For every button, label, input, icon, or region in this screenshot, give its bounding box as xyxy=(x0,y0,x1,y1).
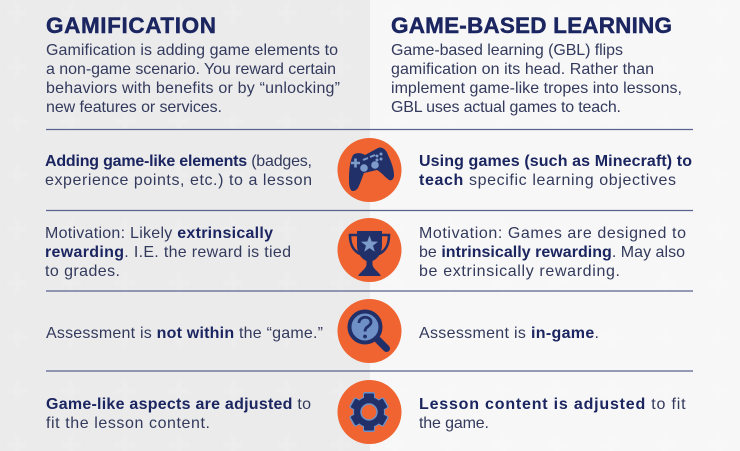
text block: game-based learning definition: GBL uses actual games to teach. xyxy=(391,99,621,116)
text block: gamification definition: a non-game scenario. You reward certain xyxy=(46,61,336,78)
text: gamification elements: experience points, etc.) to a lesson xyxy=(45,172,312,189)
row 3: assessment comparison xyxy=(46,299,599,363)
text: game-based motivation: Motivation: Games are designed to xyxy=(419,225,686,242)
text: game-based elements: Using games (such as Minecraft) to xyxy=(419,153,692,170)
text: gamification adjustment: fit the lesson content. xyxy=(46,415,210,432)
icon: trophy xyxy=(338,218,402,282)
text: game-based assessment: Assessment is in-game. xyxy=(419,325,599,342)
text: game-based adjustment: Lesson content is adjusted to fit xyxy=(419,396,686,413)
background: left panel xyxy=(0,0,370,451)
panel: gamification intro xyxy=(46,13,340,116)
icon: gear xyxy=(338,380,402,444)
heading: gamification: GAMIFICATION xyxy=(46,13,216,38)
text: gamification elements: Adding game-like elements (badges, xyxy=(45,153,312,170)
icon: magnifying glass with question mark xyxy=(338,299,402,363)
text block: game-based learning definition xyxy=(391,42,682,116)
text block: gamification definition: new features or services. xyxy=(46,99,222,116)
text: game-based motivation: be extrinsically rewarding. xyxy=(419,263,620,280)
background: right panel xyxy=(370,0,740,451)
text block: gamification definition: behaviors with benefits or by “unlocking” xyxy=(46,80,340,97)
text: gamification motivation: to grades. xyxy=(45,263,120,280)
text: gamification elements xyxy=(45,153,312,189)
text: game-based adjustment: the game. xyxy=(419,415,489,432)
text: gamification adjustment: Game-like aspects are adjusted to xyxy=(46,396,311,413)
text: game-based elements: teach specific learning objectives xyxy=(419,172,676,189)
icon: game controller xyxy=(338,138,402,202)
text block: game-based learning definition: gamification on its head. Rather than xyxy=(391,61,654,78)
text: gamification motivation: rewarding. I.E. the reward is tied xyxy=(45,244,291,261)
text: gamification assessment: Assessment is not within the “game.” xyxy=(46,325,323,342)
row 1: elements comparison xyxy=(45,138,692,202)
text: game-based elements xyxy=(419,153,692,189)
text: game-based motivation: be intrinsically rewarding. May also xyxy=(419,244,685,261)
row 2: motivation comparison xyxy=(45,218,686,282)
text: gamification motivation xyxy=(45,225,291,280)
text block: gamification definition xyxy=(46,42,340,116)
text block: game-based learning definition: implement game-like tropes into lessons, xyxy=(391,80,682,97)
text block: gamification definition: Gamification is adding game elements to xyxy=(46,42,338,59)
heading: game-based learning: GAME-BASED LEARNING xyxy=(391,13,672,38)
text: gamification motivation: Motivation: Likely extrinsically xyxy=(45,225,273,242)
panel: game-based learning intro xyxy=(391,13,682,116)
text: game-based motivation xyxy=(419,225,686,280)
text block: game-based learning definition: Game-based learning (GBL) flips xyxy=(391,42,623,59)
text: gamification adjustment xyxy=(46,396,311,432)
row 4: adjustment comparison xyxy=(46,380,686,444)
text: game-based adjustment xyxy=(419,396,686,432)
